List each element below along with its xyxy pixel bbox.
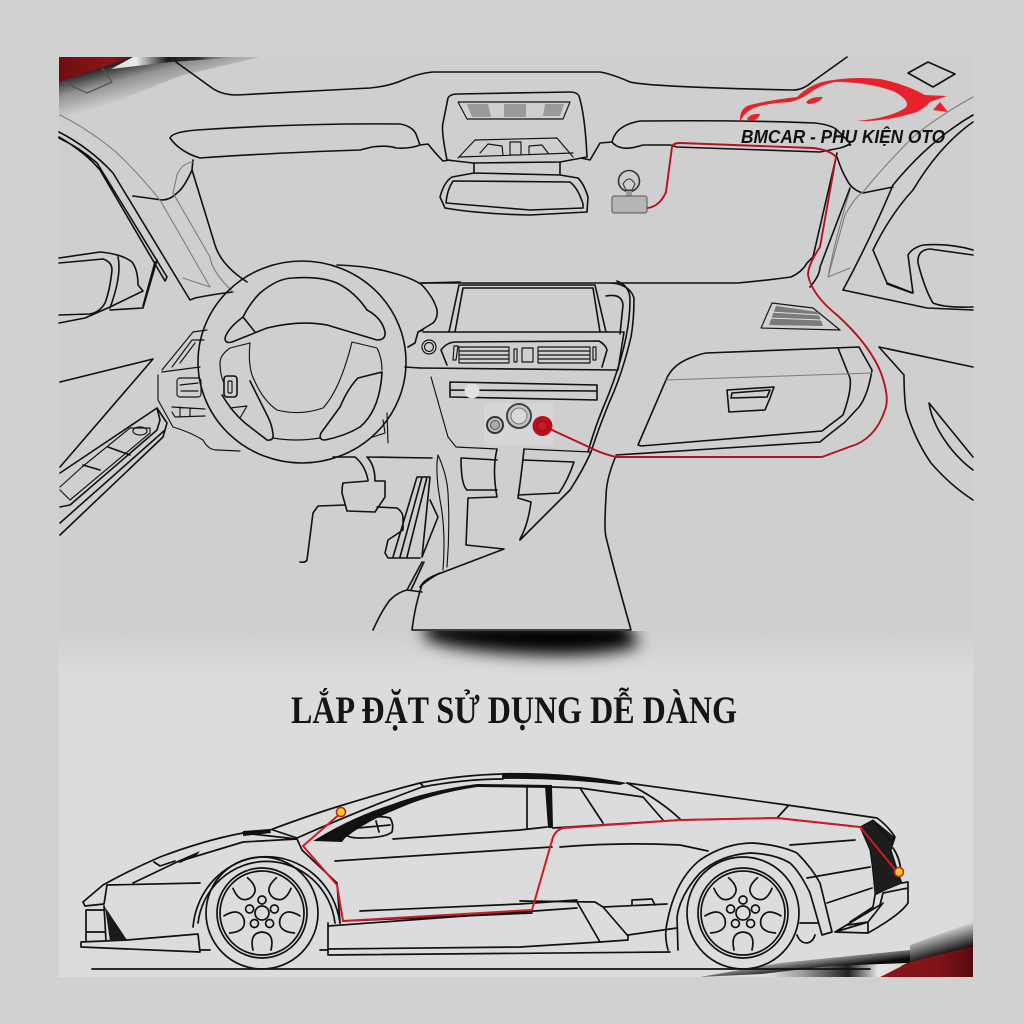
icon: red car silhouette [740, 78, 948, 122]
left door mirror [59, 252, 157, 323]
roof lining outline [176, 57, 847, 95]
center screen [449, 285, 606, 332]
right A pillar and window [837, 115, 973, 307]
glove box [616, 347, 872, 455]
overhead console [442, 92, 587, 163]
icon: red power socket [532, 416, 552, 436]
panel: side view car diagram [81, 773, 908, 969]
corner ribbon: top left [59, 57, 259, 116]
right trim roof shape [908, 62, 955, 87]
left A pillar [59, 132, 233, 300]
pedals [300, 457, 438, 562]
instrument cluster binnacle [337, 265, 460, 368]
left dashboard controls [158, 330, 388, 451]
radio slot [450, 382, 597, 400]
door card left [60, 359, 167, 535]
overhead vents [458, 102, 573, 158]
side intake [520, 899, 677, 942]
icon: rear connection dot [894, 868, 904, 876]
hood and nose [83, 833, 340, 923]
red wiring route [303, 812, 898, 921]
climate panel [420, 332, 624, 370]
black window trim [313, 784, 552, 842]
red power cable [552, 143, 887, 457]
dashboard base [412, 458, 631, 630]
dash camera [612, 170, 647, 213]
tail light black panel [860, 820, 902, 895]
logo: BMCAR [740, 78, 948, 147]
front wheel arch [193, 857, 340, 927]
logo text: BMCAR - PHỤ KIỆN OTO [741, 126, 945, 147]
driver leg [373, 562, 424, 630]
rear view mirror [440, 162, 588, 215]
right dash vent [761, 303, 840, 330]
footwell left trim [437, 455, 449, 570]
front wheel [206, 857, 318, 969]
gear lever and storage trays [420, 449, 574, 587]
ground line [92, 968, 870, 970]
rear spoiler [873, 818, 901, 872]
hood vent and cowl [177, 829, 271, 863]
windscreen pillar lines [273, 779, 503, 838]
center stack trim [520, 281, 634, 540]
dashboard shadow [425, 622, 640, 655]
rear bumper [835, 882, 908, 933]
wing mirror [345, 817, 393, 838]
left sun visor [170, 124, 450, 161]
front bumper [81, 906, 200, 952]
rear wheel [687, 857, 799, 969]
title: LẮP ĐẶT SỬ DỤNG DỄ DÀNG [291, 686, 737, 732]
door sills [200, 908, 670, 955]
rear fender [666, 840, 872, 950]
rear side window lines [527, 783, 680, 828]
corner ribbon: bottom right [700, 922, 973, 977]
windshield left edge [133, 160, 247, 282]
right door panel [879, 347, 973, 500]
socket panel [484, 403, 553, 445]
right sun visor [581, 121, 850, 160]
beltline and door lines [335, 806, 860, 921]
car roof outline [83, 774, 877, 902]
black air intake [105, 907, 127, 941]
black roof strip [502, 773, 627, 785]
black door pillar [545, 786, 553, 828]
windshield right edge [420, 153, 837, 283]
steering wheel [198, 261, 406, 463]
panel: car interior line drawing [59, 57, 973, 630]
icon: front connection dot [336, 808, 346, 816]
console outline [431, 377, 591, 452]
